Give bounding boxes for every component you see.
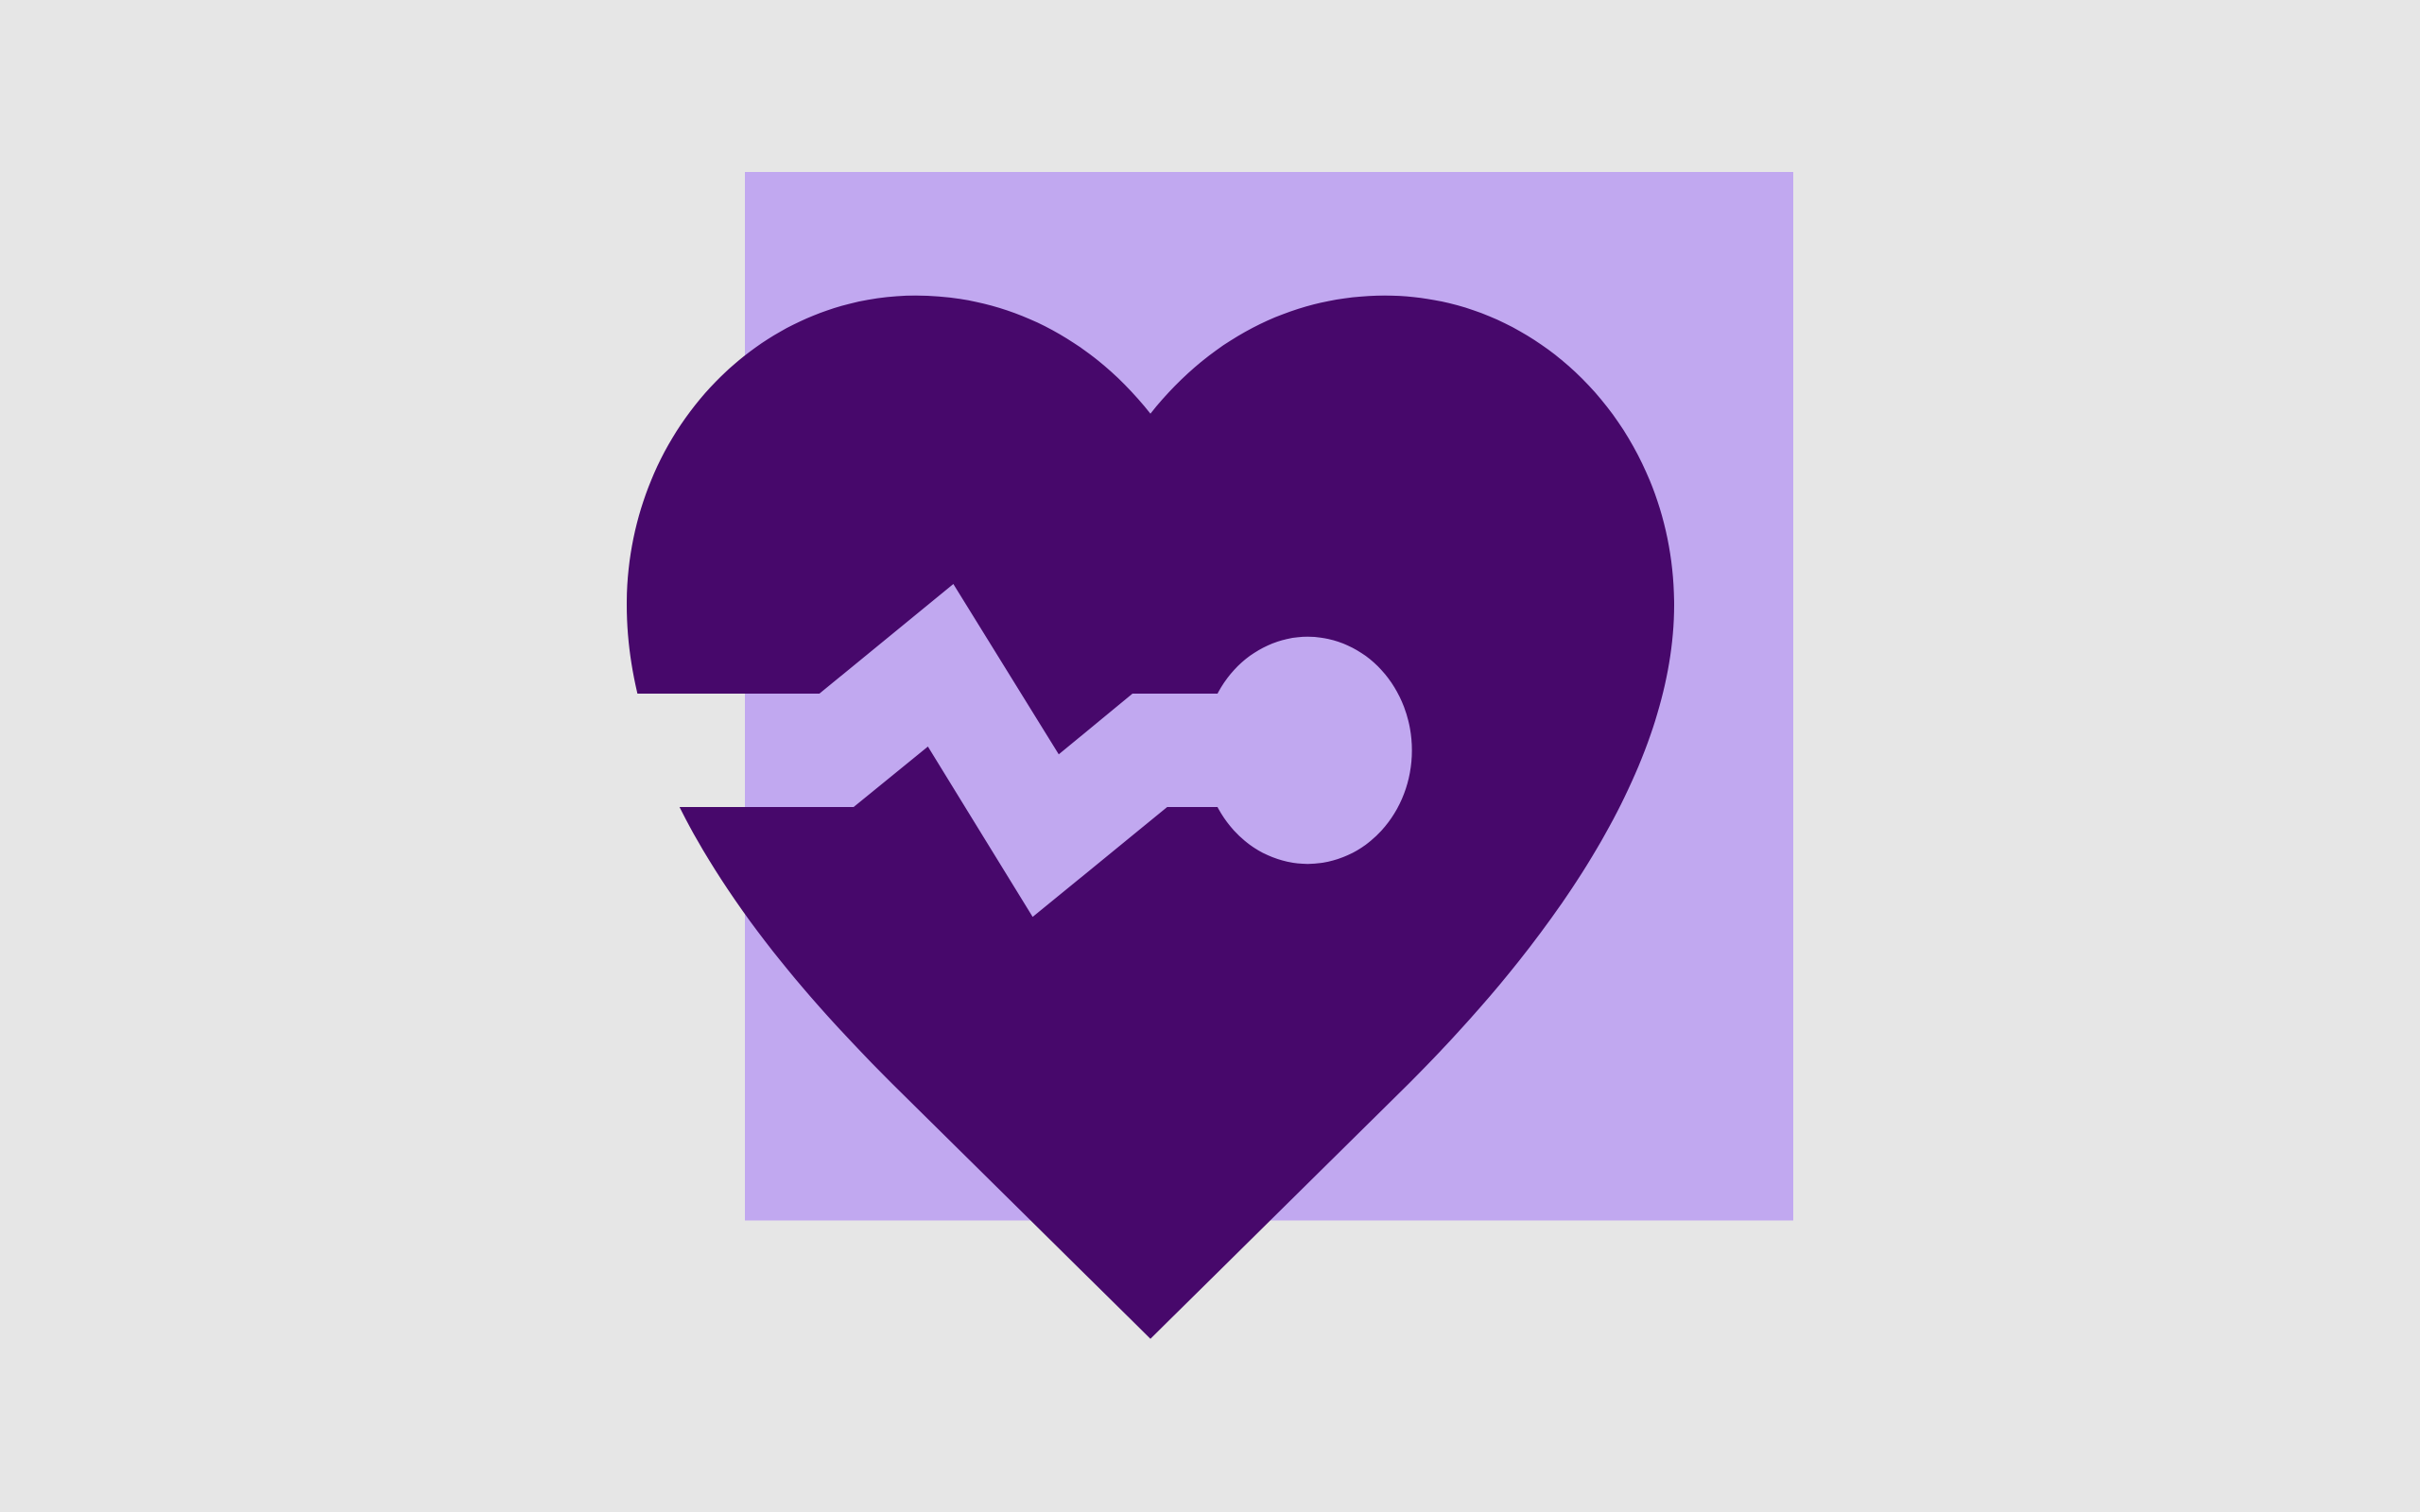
background square xyxy=(745,172,1793,1221)
icon: heart with pulse line on lilac square xyxy=(627,172,1793,1339)
icon: heart with pulse cut-out xyxy=(627,296,1674,1339)
